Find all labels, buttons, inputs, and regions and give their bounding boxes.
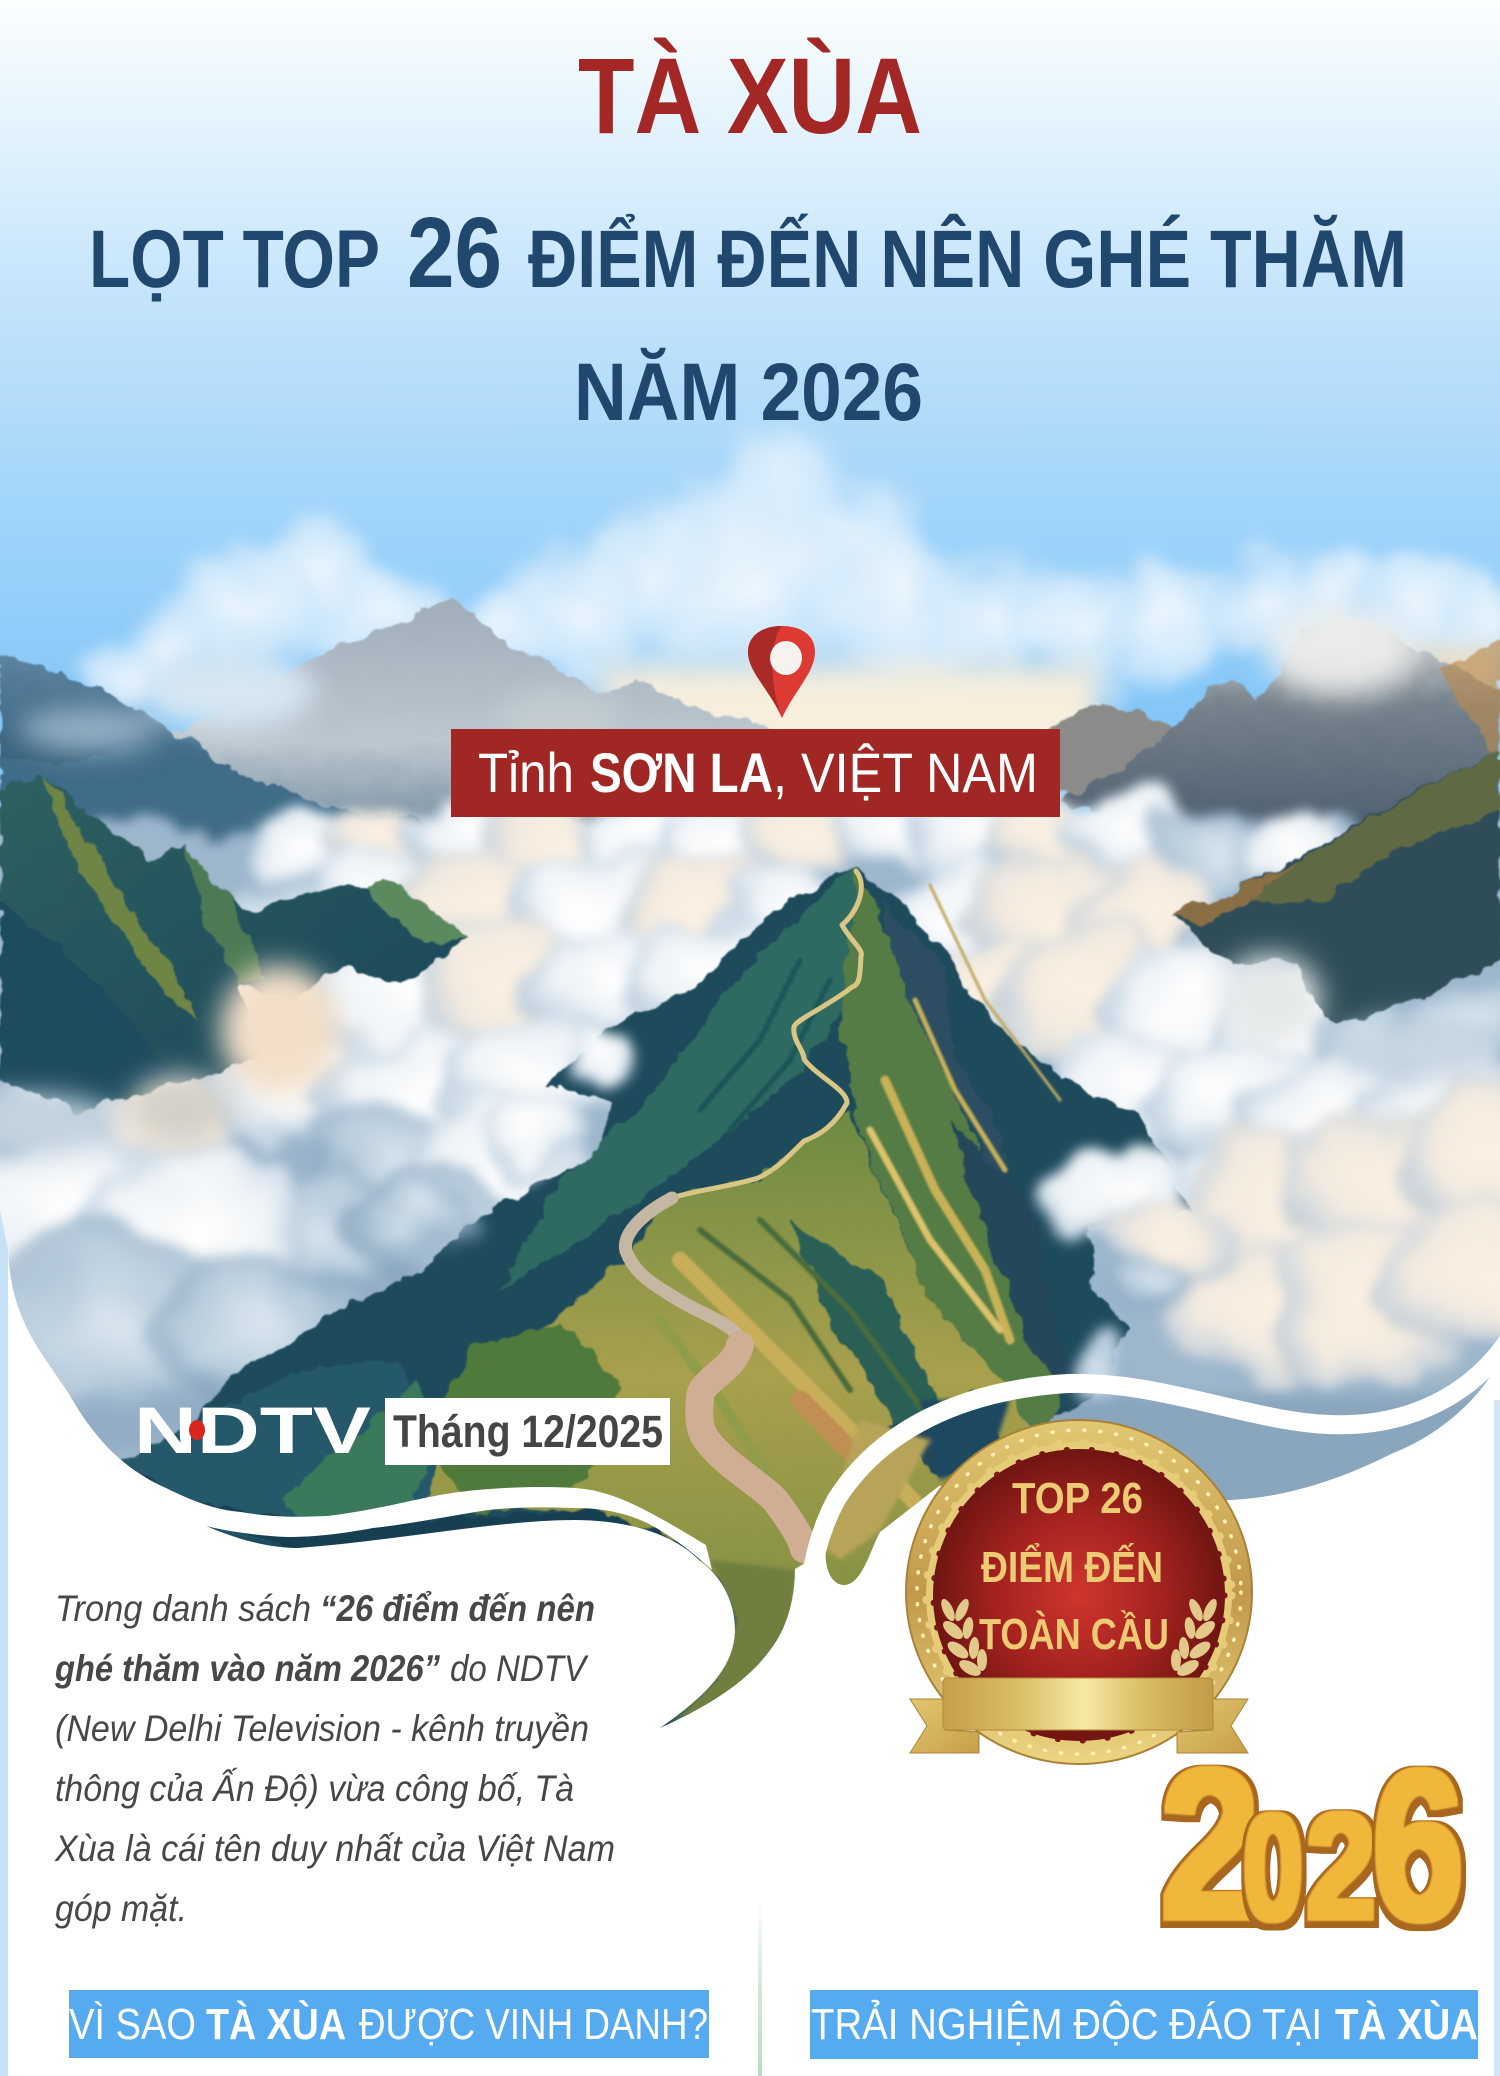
NDTV logo: NDTV — [134, 1393, 371, 1467]
far right hills — [1048, 703, 1172, 796]
white swoosh: right — [805, 1335, 1500, 1620]
intro paragraph: góp mặt. — [55, 1888, 187, 1929]
background cumulus clouds — [70, 420, 1500, 730]
medal text: TOÀN CẦU — [979, 1609, 1169, 1659]
far mountains — [0, 596, 1500, 870]
golden ridge highlights — [660, 885, 1060, 1520]
far right grey mountain — [1060, 616, 1500, 832]
intro paragraph: do NDTV — [450, 1648, 589, 1689]
intro paragraph: (New Delhi Television - kênh truyền — [55, 1708, 589, 1749]
button: unique experiences at Tà Xùa: TRẢI NGHIỆM ĐỘC ĐÁO TẠI — [811, 1999, 1322, 2049]
intro paragraph: thông của Ấn Độ) vừa công bố, Tà — [55, 1767, 574, 1809]
location label — [451, 729, 1060, 817]
far grey mountain — [170, 597, 770, 826]
medal: Top 26 global destinations — [906, 1420, 1252, 1764]
headline line 1: LỌT TOP — [89, 214, 380, 305]
laurel left — [938, 1597, 987, 1679]
gold 3D 2026: 0 — [1243, 1783, 1303, 1951]
location label: Tỉnh — [478, 741, 574, 804]
right mountain light — [1240, 748, 1500, 900]
lower rock face — [950, 1120, 1075, 1390]
left teal slope — [500, 869, 856, 1290]
left mountain second ridge — [185, 845, 265, 985]
left mountain sunlit ridge — [40, 775, 200, 1020]
lower olive slope — [420, 1110, 1040, 1640]
grass foreground — [670, 1400, 1010, 1725]
second blue ridge — [0, 736, 422, 850]
dark strip under left swoosh — [60, 1425, 700, 1570]
mountain silhouette — [100, 869, 1190, 1730]
intro paragraph: Xùa là cái tên duy nhất của Việt Nam — [54, 1828, 615, 1869]
gold 3D 2026: 2 — [1306, 1782, 1376, 1950]
date box: Tháng 12/2025 — [393, 1406, 663, 1457]
mountain base haze — [0, 955, 1500, 1155]
location label: SƠN LA — [590, 741, 773, 804]
road — [625, 871, 861, 1549]
shaded green stripe — [790, 1220, 960, 1440]
red scalloped centre — [933, 1449, 1225, 1741]
central green ridge — [840, 869, 1065, 1440]
intro paragraph: Trong danh sách — [55, 1588, 311, 1629]
left mountain body — [0, 775, 470, 1112]
sky gradient — [0, 26, 1500, 822]
far left blue ridges — [0, 654, 175, 768]
green patch — [420, 1320, 620, 1515]
right mountain body — [1172, 748, 1500, 1026]
gold 3D 2026 — [1160, 1725, 1464, 1965]
intro paragraph: “26 điểm đến nên — [320, 1588, 595, 1629]
low shadow under right clouds — [1050, 1388, 1480, 1500]
left and right green mountains — [0, 748, 1500, 1112]
ring dots — [917, 1430, 1241, 1754]
intro paragraph — [54, 1588, 615, 1929]
mountain facets — [60, 869, 1190, 1730]
headline line 2: NĂM 2026 — [574, 347, 923, 438]
main mountain with winding road — [60, 869, 1190, 1730]
button: unique experiences at Tà Xùa: TÀ XÙA — [1335, 1999, 1478, 2049]
forest lower left — [90, 1360, 440, 1550]
button: unique experiences at Tà Xùa — [810, 1990, 1478, 2059]
mist over far mountains — [20, 605, 1415, 752]
gold 3D 2026: 6 — [1372, 1726, 1464, 1965]
button: why Tà Xùa was honoured: VÌ SAO — [69, 2000, 196, 2049]
headline line 1: 26 — [407, 197, 502, 309]
button: why Tà Xùa was honoured: ĐƯỢC VINH DANH? — [359, 2000, 708, 2049]
icon: location pin — [748, 626, 815, 718]
laurel right — [1171, 1597, 1220, 1679]
green slope lower left — [280, 1380, 440, 1545]
left mountain shade — [0, 900, 170, 1112]
horizon cream haze — [600, 650, 1500, 785]
location label: , VIỆT NAM — [773, 741, 1038, 804]
button: why Tà Xùa was honoured — [69, 1990, 709, 2058]
button: why Tà Xùa was honoured: TÀ XÙA — [206, 1999, 346, 2049]
date box — [385, 1398, 670, 1465]
ribbon — [910, 1678, 1248, 1753]
medal text — [979, 1474, 1169, 1659]
sunlit right edge — [1440, 640, 1500, 760]
intro paragraph: ghé thăm vào năm 2026” — [54, 1648, 440, 1689]
right mountain brown rim — [1172, 862, 1300, 925]
gold ring — [906, 1420, 1252, 1764]
white swoosh: left — [69, 1394, 712, 1570]
title: Tà Xùa: TÀ XÙA — [578, 35, 922, 156]
medal text: ĐIỂM ĐẾN — [981, 1541, 1163, 1592]
sea of clouds — [0, 787, 1500, 1565]
wavy pale gold band — [926, 1442, 1232, 1748]
right rock face — [880, 900, 1010, 1200]
left mountain spur — [365, 884, 470, 945]
headline line 1 — [89, 197, 1407, 309]
gold 3D 2026: 2 — [1160, 1725, 1260, 1964]
medal text: TOP 26 — [1012, 1474, 1143, 1523]
dark stripe by the medal — [890, 1390, 1010, 1480]
clouds in front of mountain foot — [365, 1034, 1240, 1396]
